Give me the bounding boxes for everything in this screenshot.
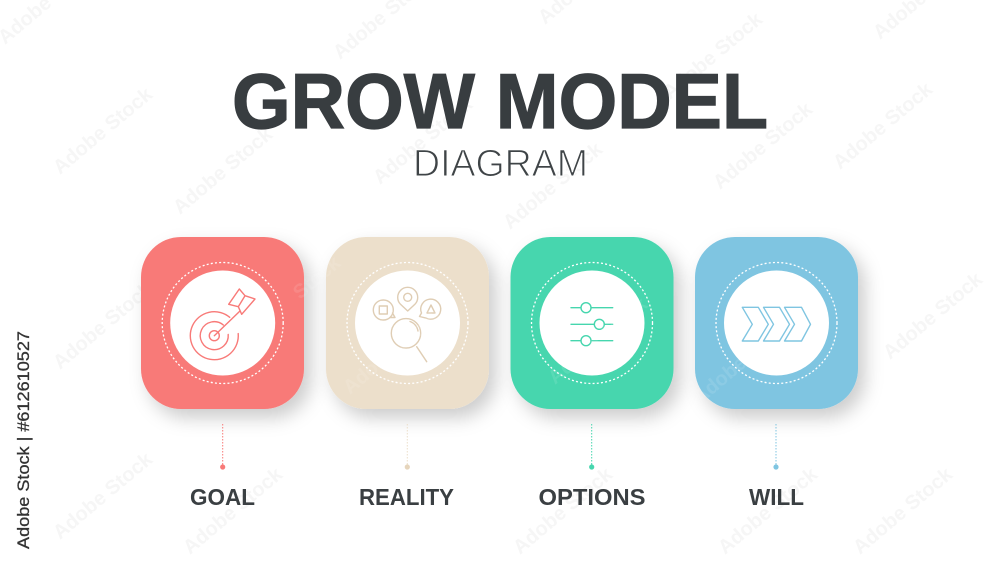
background watermarks: Adobe Stock bbox=[169, 123, 278, 219]
icon: three chevrons bbox=[742, 307, 810, 341]
watermark credit: Adobe Stock | #612610527 bbox=[15, 331, 33, 549]
connector: goal bbox=[220, 424, 225, 470]
background watermarks: Adobe Stock bbox=[49, 448, 158, 544]
connector: reality bbox=[405, 424, 410, 470]
panel: goal bbox=[141, 237, 304, 409]
background watermarks: Adobe Stock bbox=[509, 463, 618, 559]
background watermarks: Adobe Stock bbox=[369, 93, 478, 189]
background watermarks: Adobe Stock bbox=[879, 268, 988, 364]
background watermarks: Adobe Stock bbox=[659, 8, 768, 104]
label: goal: GOAL bbox=[190, 484, 255, 510]
card watermarks bbox=[289, 251, 751, 409]
card watermarks: Adobe Stock bbox=[544, 293, 653, 389]
background watermarks: Adobe Stock bbox=[709, 98, 818, 194]
panel: options bbox=[510, 237, 674, 409]
label: reality: REALITY bbox=[359, 484, 454, 510]
icon: sliders bbox=[571, 303, 613, 346]
connector: options bbox=[589, 424, 594, 470]
icon: target with arrow bbox=[190, 289, 255, 360]
background watermarks: Adobe Stock bbox=[49, 278, 158, 374]
panel: will bbox=[695, 237, 858, 409]
title: GROW MODEL bbox=[232, 57, 768, 145]
background watermarks: Adobe Stock bbox=[49, 83, 158, 179]
card watermarks: Stock bbox=[289, 251, 346, 304]
connector: will bbox=[773, 424, 779, 470]
icon: magnifier with shape bubbles bbox=[373, 287, 441, 362]
background watermarks: Adobe Stock bbox=[714, 463, 823, 559]
background watermarks: Adobe Stock bbox=[849, 463, 958, 559]
card watermarks: Adobe bbox=[689, 352, 751, 409]
label: will: WILL bbox=[749, 484, 804, 510]
panel: reality bbox=[326, 237, 489, 409]
background watermarks: Adobe Stock bbox=[499, 138, 608, 234]
background watermarks: Adobe Stock bbox=[179, 463, 288, 559]
background watermarks: Adobe Stock bbox=[829, 78, 938, 174]
subtitle: DIAGRAM bbox=[413, 143, 588, 185]
card watermarks: Adobe Stock bbox=[339, 303, 448, 399]
label: options: OPTIONS bbox=[538, 484, 646, 510]
